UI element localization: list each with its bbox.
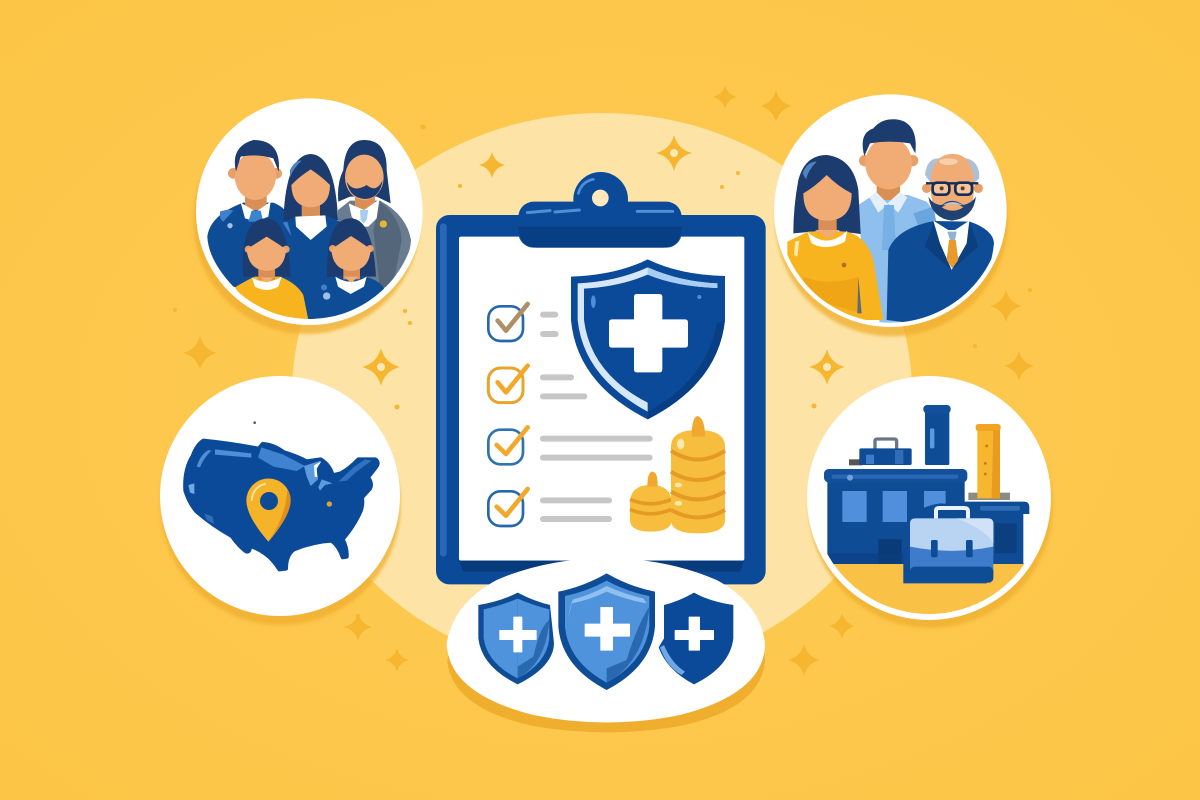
panel: clipboard	[436, 172, 766, 584]
paper sheet	[459, 237, 744, 561]
person: right bearded man	[338, 140, 411, 290]
icon: blue chimney	[923, 405, 951, 465]
panel: shields badge	[447, 558, 765, 732]
panel: family group circle	[193, 98, 423, 334]
icon: location pin	[246, 478, 291, 542]
icon: large medical shield	[571, 259, 725, 419]
person: right child	[308, 218, 385, 320]
icon: briefcase	[903, 503, 993, 583]
map of the USA	[185, 441, 378, 569]
checklist item 2	[488, 366, 587, 403]
icon: right building block	[964, 502, 1030, 564]
ground	[833, 563, 1025, 614]
person: centre woman	[281, 154, 343, 323]
person: middle man	[858, 119, 937, 323]
person: senior man	[887, 154, 994, 323]
icon: white cross	[609, 294, 688, 372]
pale central glow	[292, 113, 912, 673]
decorative sparkles	[173, 85, 1034, 676]
clipboard clasp	[518, 172, 682, 248]
panel: United States map circle	[160, 376, 401, 625]
icon: centre shield	[558, 573, 655, 690]
icon: right shield	[659, 593, 733, 684]
checklist item 1	[488, 304, 559, 341]
person: woman in yellow	[787, 155, 883, 320]
icon: yellow chimney	[968, 424, 1010, 500]
icon: small rooftop case	[849, 439, 912, 465]
panel: employers and business circle	[800, 376, 1060, 628]
icon: gold coin stacks	[630, 416, 725, 533]
person: left man	[207, 140, 288, 288]
checklist item 4	[488, 489, 612, 526]
panel: adults and senior circle	[774, 94, 1008, 336]
person: left child	[235, 218, 308, 320]
checklist item 3	[488, 427, 653, 464]
icon: main building	[824, 469, 967, 564]
clipboard board	[436, 215, 766, 584]
icon: left shield	[478, 593, 554, 684]
